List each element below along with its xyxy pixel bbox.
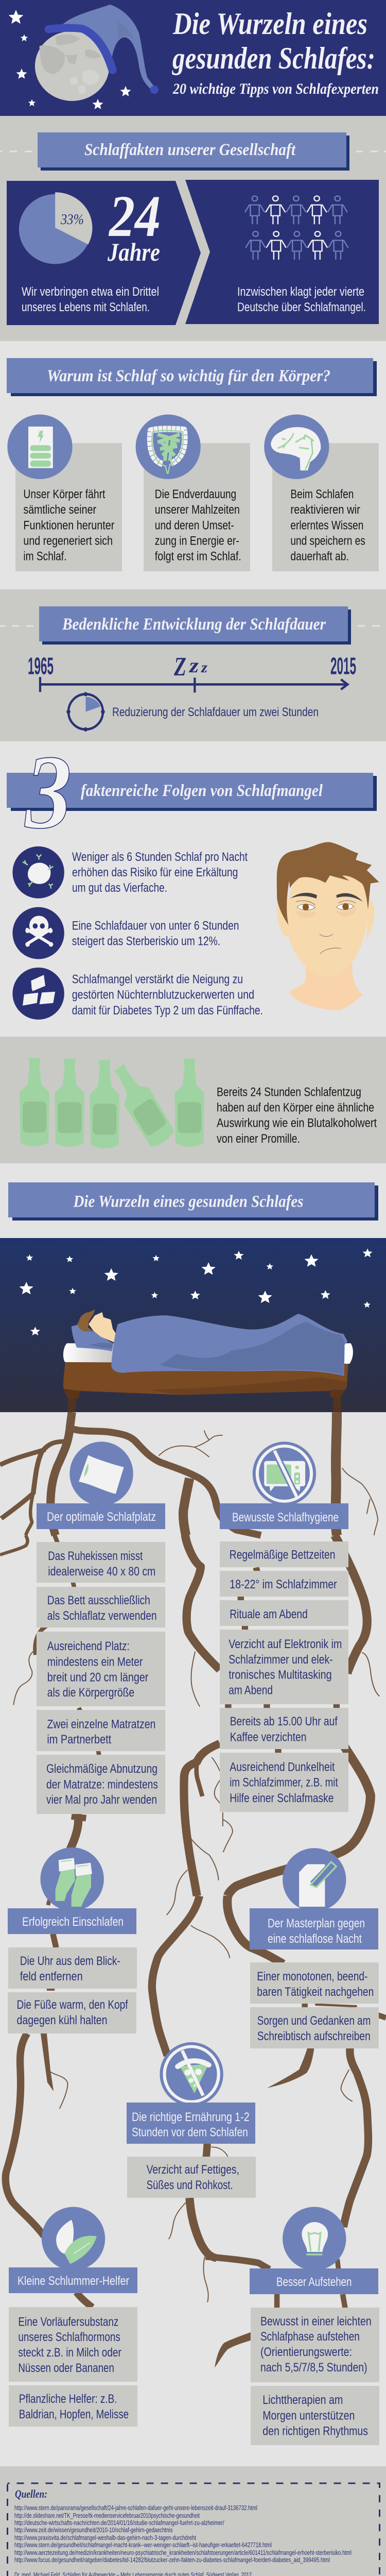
icon: no electronics: [253, 1442, 316, 1505]
tip: Schlafzimmer und elek-: [229, 1653, 333, 1667]
big number: 24: [108, 183, 161, 249]
text: folgt erst im Schlaf.: [155, 550, 241, 564]
tip: breit und 20 cm länger: [47, 1670, 148, 1685]
heading: Warum: [7, 358, 377, 396]
panel: card Verdauung: [136, 414, 250, 571]
zzz: [173, 652, 207, 682]
panel: Bewusste Schlafhygiene: [220, 1442, 348, 1812]
source list: http://deutsche-wirtschafts-nachrichten.de/2014/01/16/studie-schlafmangel-fuehrt-zu-alzheimer/: [14, 2519, 224, 2527]
tip: Schlafphase aufstehen: [260, 2330, 360, 2344]
panel: Kleine Schlummer-Helfer: Kleine Schlummer-Helfer: [17, 2274, 129, 2288]
icon: virus: [12, 846, 64, 899]
tip: [220, 1753, 348, 1812]
tip: im Schlafzimmer, z.B. mit: [230, 1775, 338, 1790]
icon: skull: [12, 907, 64, 959]
text: und deren Umset-: [155, 518, 234, 533]
title: [171, 7, 379, 97]
tip: unseres Schlafhormons: [18, 2330, 120, 2344]
heading: Warum: Warum ist Schlaf so wichtig für den Körper?: [47, 367, 330, 385]
chart: timeline: [28, 652, 356, 732]
text: erhöhen das Risiko für eine Erkältung: [72, 866, 238, 879]
tip: [251, 2386, 379, 2445]
tip: Verzicht auf Fettiges,: [147, 2163, 239, 2177]
panel: sources: [7, 2483, 380, 2576]
panel: Ernährung: Die richtige Ernährung 1-2: [132, 2110, 250, 2124]
tip: [220, 1708, 348, 1749]
heading: Quellen: Quellen:: [15, 2487, 47, 2500]
tip: [127, 2157, 256, 2198]
tip: Zwei einzelne Matratzen: [47, 1718, 155, 1731]
text: Eine Schlafdauer von unter 6 Stunden: [72, 919, 239, 933]
text: [290, 487, 365, 564]
text: [72, 973, 263, 1018]
tip: als Schlaflatz verwenden: [47, 1609, 157, 1623]
tip: [250, 2007, 379, 2048]
icon: moon with nightcap: [35, 5, 159, 101]
tip: [37, 1755, 165, 1814]
icon: no pizza: [160, 2042, 223, 2106]
text: Beim Schlafen: [290, 487, 354, 501]
tip: [37, 1632, 165, 1706]
label: [220, 1503, 348, 1529]
tip: Kaffee verzichten: [230, 1730, 307, 1744]
tip: Süßes und Rohkost.: [147, 2178, 233, 2192]
big three: 3: [24, 734, 72, 851]
panel: Ernährung: [127, 2042, 256, 2198]
panel: Bewusste Schlafhygiene: Bewusste Schlafhygiene: [232, 1511, 339, 1524]
text: [155, 487, 241, 564]
tip: Nüssen oder Bananen: [18, 2361, 114, 2375]
text: [72, 850, 248, 895]
icon: brain: [264, 414, 329, 479]
item: Erkältung: [12, 846, 248, 899]
heading: 3 Folgen: [7, 734, 377, 851]
tip: Das Bett ausschließlich: [47, 1594, 150, 1607]
panel: night sky: [0, 1238, 386, 1412]
panel: Der optimale Schlafplatz: Der optimale Schlafplatz: [47, 1510, 156, 1524]
text: Weniger als 6 Stunden Schlaf pro Nacht: [72, 850, 248, 864]
tip: Baldrian, Hopfen, Melisse: [19, 2408, 129, 2421]
label: [250, 2268, 378, 2294]
text: Die Endverdauung: [155, 487, 236, 501]
label: [127, 2103, 255, 2144]
tip: Bereits ab 15.00 Uhr auf: [230, 1715, 338, 1728]
tip: vier Mal pro Jahr wenden: [46, 1793, 157, 1807]
label: [37, 1503, 165, 1529]
tip: Regelmäßige Bettzeiten: [230, 1548, 336, 1562]
tip: (Orientierungswerte:: [260, 2345, 352, 2359]
icon: socks: [40, 1848, 104, 1911]
icon: people: [245, 196, 348, 260]
tip: [250, 1962, 379, 2004]
panel: Erfolgreich Einschlafen: [8, 1848, 137, 2033]
text: Reduzierung der Schlafdauer um zwei Stunden: [112, 705, 319, 719]
tip: Ausreichend Dunkelheit: [230, 1760, 335, 1774]
source list: http://www.stern.de/panorama/gesellschaft/24-jahre-schlafen-dafuer-geht-unsere-lebenszeit-drauf-3136732.html: [14, 2504, 257, 2512]
text: und speichern es: [290, 534, 365, 548]
panel: Promille: [20, 1058, 377, 1150]
tip: als die Körpergröße: [47, 1686, 134, 1700]
text: Schlafmangel verstärkt die Neigung zu: [72, 973, 243, 987]
bed frame: [63, 1362, 348, 1395]
text: dauerhaft ab.: [290, 550, 349, 564]
panel: Besser Aufstehen: Besser Aufstehen: [276, 2275, 352, 2289]
text: steigert das Sterberiskio um 12%.: [72, 935, 220, 948]
stars: [9, 10, 131, 109]
text: [72, 919, 239, 948]
text: reaktivieren wir: [290, 503, 360, 517]
zzz: z: [188, 654, 199, 677]
panel: Ernährung: Stunden vor dem Schlafen: [132, 2126, 248, 2139]
tip: Eine Vorläufersubstanz: [18, 2315, 118, 2329]
icon: note and pencil: [283, 1848, 346, 1911]
blanket: [111, 1314, 347, 1376]
tip: Lichttherapien am: [262, 2393, 343, 2407]
tip: [37, 1587, 165, 1628]
tip: [220, 1600, 348, 1626]
tip: Gleichmäßige Abnutzung: [46, 1762, 157, 1776]
text: Drittel: Wir verbringen etwa ein Drittel: [22, 285, 159, 299]
tip: [8, 1992, 136, 2033]
text: zung in Energie er-: [155, 534, 239, 548]
tip: Die Füße warm, den Kopf: [16, 1998, 128, 2012]
tip: [220, 1571, 348, 1597]
icon: sugar cubes: [12, 968, 64, 1020]
panel: 24 Jahre: 33%: [60, 212, 84, 228]
tip: im Partnerbett: [47, 1733, 111, 1747]
source list: http://www.praxisvita.de/schlafmangel-weshalb-das-gehirn-nach-3-tagen-durchdreht: [14, 2534, 196, 2541]
tip: [37, 1710, 165, 1751]
text: erlerntes Wissen: [290, 518, 363, 533]
tip: Hilfe einer Schlafmaske: [230, 1791, 334, 1805]
label: [8, 1908, 136, 1934]
icon: light bulb: [283, 2207, 346, 2270]
infographic: 2015: [330, 653, 356, 680]
icon: leaves: [42, 2207, 105, 2270]
text: sämtliche seiner: [23, 503, 96, 517]
item: Diabetes: [12, 968, 263, 1020]
tip: Verzicht auf Elektronik im: [229, 1637, 342, 1651]
panel: Der Masterplan: eine schlaflose Nacht: [268, 1932, 362, 1946]
heading: Schlaffakten: [0, 132, 386, 171]
panel: card Körper: [7, 414, 122, 571]
tip: Ausreichend Platz:: [47, 1639, 130, 1653]
source list: http://www.stern.de/gesundheit/schlafmangel-macht-krank--wer-weniger-schlaeft--ist-haeufiger-erkaeltet-6427718.html: [14, 2541, 272, 2549]
text: Drittel: unseres Lebens mit Schlafen.: [22, 300, 150, 314]
text: [217, 1085, 377, 1146]
tip: am Abend: [229, 1684, 273, 1697]
panel: Kleine Schlummer-Helfer: [9, 2207, 137, 2427]
stars: [20, 1248, 373, 1335]
tip: steckt z.B. in Milch oder: [18, 2346, 121, 2360]
icon: bottles: [20, 1058, 204, 1150]
tip: [8, 1947, 137, 1989]
tip: [37, 1542, 165, 1583]
zzz: z: [201, 659, 207, 676]
icon: pillow: [69, 1442, 133, 1505]
tip: feld entfernen: [20, 1970, 83, 1984]
text: Unser Körper fährt: [23, 487, 106, 501]
axis arrow: [40, 677, 347, 692]
tip: dagegen kühl halten: [16, 2013, 107, 2027]
panel: Erfolgreich Einschlafen: Erfolgreich Einschlafen: [22, 1915, 124, 1929]
source list: http://www.zeit.de/wissen/gesundheit/2010-10/schlaf-gehirn-gedaechtnis: [14, 2527, 173, 2534]
item: Sterberisiko: [12, 907, 239, 959]
tip: [9, 2385, 137, 2427]
tip: [220, 1541, 348, 1567]
heading: Bedenkliche Entwicklung: [0, 606, 380, 645]
panel: 24 Jahre: [7, 181, 201, 325]
label: [9, 2267, 137, 2293]
mattress: [63, 1343, 353, 1364]
heading: Die Wurzeln: Die Wurzeln eines gesunden Schlafes: [73, 1192, 303, 1211]
panel: Der optimale Schlafplatz: [37, 1442, 165, 1814]
icon: intestine: [136, 414, 201, 479]
tip: mindestens ein Meter: [47, 1655, 143, 1669]
heading: 3 Folgen: faktenreiche Folgen von Schlafmangel: [81, 782, 323, 800]
icon: clock: [66, 692, 105, 732]
text: unserer Mahlzeiten: [155, 503, 240, 517]
tip: Rituale am Abend: [230, 1607, 308, 1621]
tip: tronisches Multitasking: [229, 1668, 332, 1682]
panel: 24 Jahre: Jahre: [107, 238, 160, 266]
label: [250, 1908, 378, 1950]
heading: Bedenkliche Entwicklung: Bedenkliche Entwicklung der Schlafdauer: [62, 615, 326, 634]
illustration: tired face: [277, 842, 379, 1010]
text: um gut das Vierfache.: [72, 881, 167, 895]
tip: Pflanzliche Helfer: z.B.: [19, 2392, 117, 2406]
panel: Besser Aufstehen: [250, 2207, 379, 2445]
roots: [0, 1412, 386, 2367]
text: damit für Diabetes Typ 2 um das Fünffache.: [72, 1004, 263, 1018]
tip: Die Uhr aus dem Blick-: [20, 1954, 120, 1968]
heading: Die Wurzeln: [8, 1182, 378, 1221]
panel: card Wissen: [264, 414, 379, 571]
text: Funktionen herunter: [23, 518, 114, 533]
source list: [14, 2504, 359, 2576]
tip: 18-22° im Schlafzimmer: [230, 1578, 337, 1591]
bed legs: [68, 1397, 341, 1412]
text: und regeneriert sich: [23, 534, 113, 548]
panel: Schlafmangel: [185, 180, 379, 324]
panel: header: [0, 0, 386, 116]
text: von einer Promille.: [217, 1132, 300, 1146]
tip: [220, 1630, 348, 1704]
pillow: [72, 1324, 113, 1351]
source list: http://de.slideshare.net/TK_Presse/tk-medienservicefebruar2010psychische-gesundheit: [14, 2512, 200, 2519]
tip: [251, 2308, 379, 2382]
text: Drittel: [22, 285, 159, 314]
tip: [9, 2307, 137, 2382]
tip: Das Ruhekissen misst: [48, 1549, 143, 1563]
chart: timeline: 1965: [28, 653, 54, 680]
text: [23, 487, 114, 564]
text: gestörten Nüchternblutzuckerwerten und: [72, 988, 254, 1002]
text: vierte Deutsche: [237, 285, 366, 314]
heading: Schlaffakten: Schlaffakten unserer Gesellschaft: [84, 141, 296, 159]
panel: Der Masterplan: [250, 1848, 379, 2048]
tip: idealerweise 40 x 80 cm: [48, 1565, 155, 1579]
text: im Schlaf.: [23, 550, 66, 564]
zzz: Z: [173, 652, 186, 682]
head: [89, 1312, 116, 1343]
tip: der Matratze: mindestens: [46, 1777, 158, 1792]
icon: battery: [7, 414, 73, 479]
pie chart 33%: [19, 192, 92, 264]
tip: Morgen unterstützen: [262, 2409, 355, 2422]
illustration: sleeping person in bed: [63, 1310, 353, 1412]
